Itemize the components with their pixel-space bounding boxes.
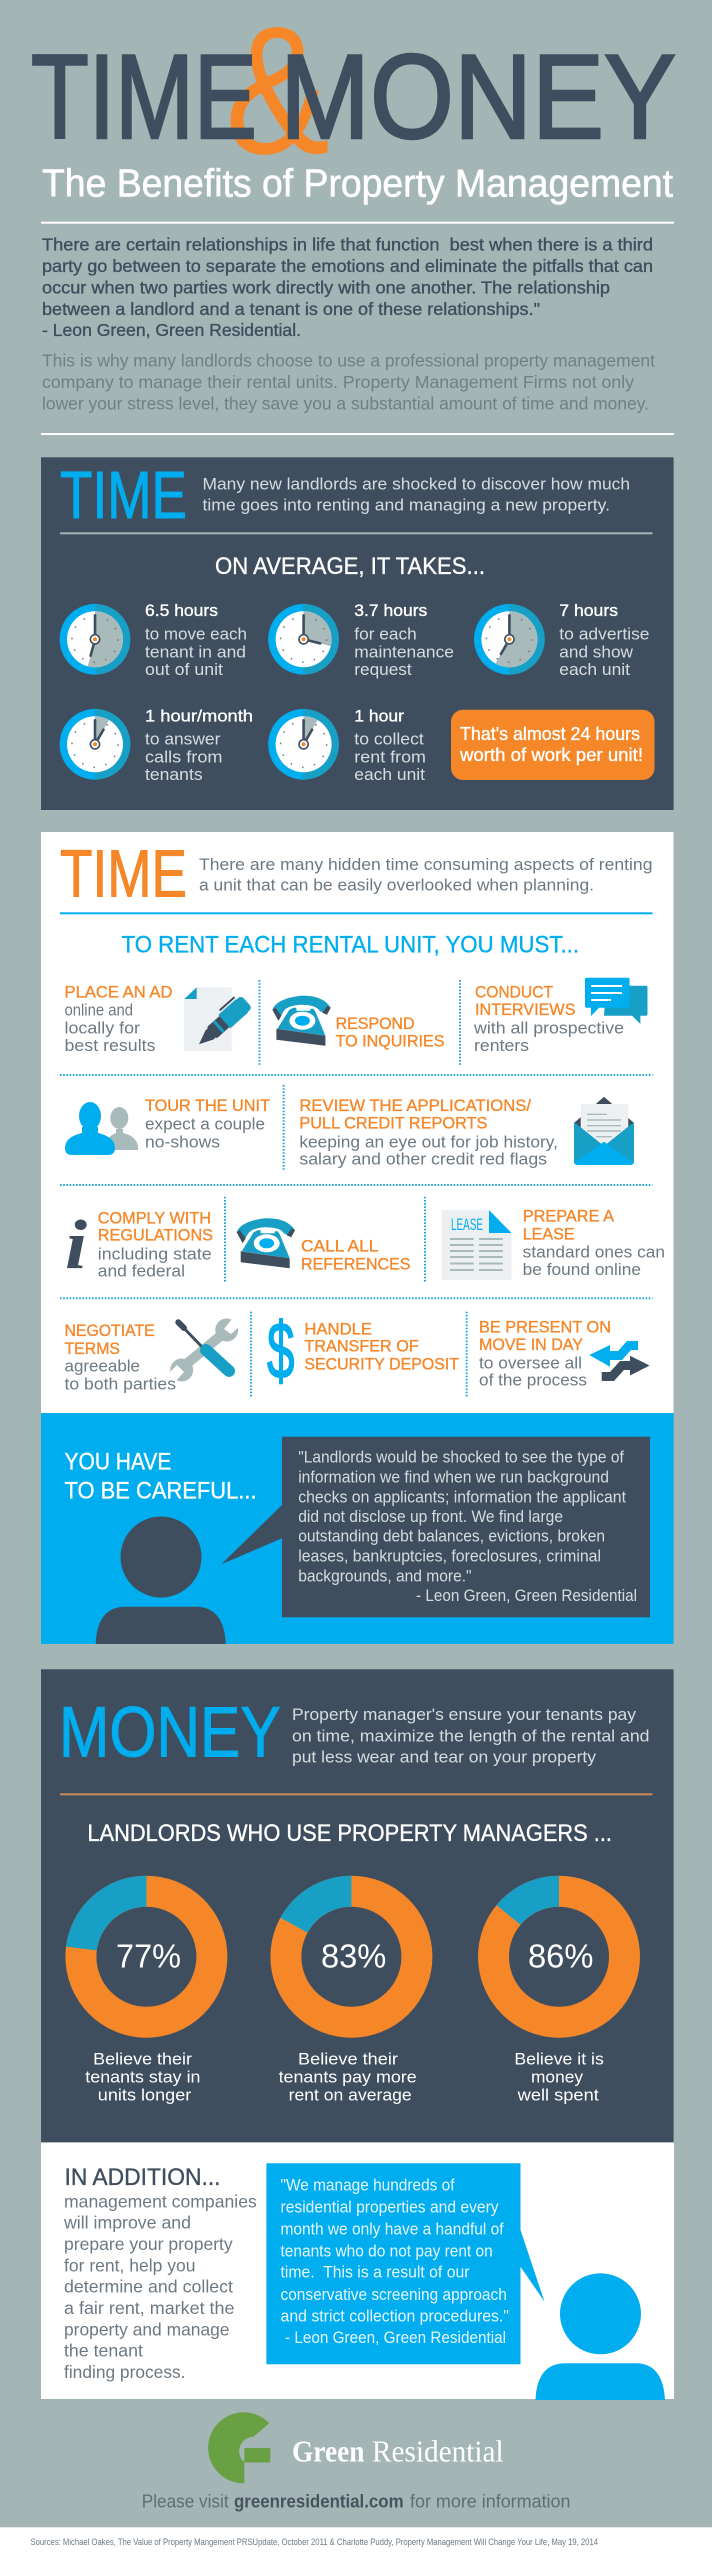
item: respond to inquiries: RESPOND [336, 1014, 415, 1033]
speech bubble quote: leases, bankruptcies, foreclosures, criminal [298, 1548, 601, 1566]
speech bubble quote: conservative screening approach [280, 2286, 507, 2304]
label: 86%: Believe it is [514, 2050, 604, 2068]
item: call all references: REFERENCES [301, 1254, 410, 1273]
footer: sources [0, 2527, 712, 2560]
intro text: a unit that can be easily overlooked when planning. [199, 876, 594, 895]
text: 3.7 hours: request [354, 661, 412, 679]
intro paragraph [42, 351, 655, 413]
subheading: LANDLORDS WHO USE PROPERTY MANAGERS ... [87, 1820, 612, 1847]
item: place an ad [64, 982, 172, 1055]
icon: clock 1 hour [268, 709, 339, 780]
intro quote [42, 235, 653, 340]
item: handle transfer: TRANSFER OF [304, 1337, 419, 1356]
text: 1 hour: 1 hour [354, 707, 404, 726]
item: tour the unit: TOUR THE UNIT [145, 1096, 270, 1115]
item: be present: MOVE IN DAY [479, 1335, 583, 1354]
icon: clock 6.5 hours [60, 604, 130, 675]
icon: chat bubbles [585, 978, 648, 1024]
item: review applications: PULL CREDIT REPORTS [299, 1113, 487, 1132]
logo: Green Residential: Residential [372, 2434, 504, 2469]
label: 86%: money [531, 2069, 584, 2087]
text block: finding process. [64, 2362, 186, 2382]
speech bubble quote: - Leon Green, Green Residential [416, 1587, 637, 1605]
heading: TO BE CAREFUL... [64, 1477, 257, 1504]
item: negotiate terms: NEGOTIATE [64, 1321, 155, 1340]
logo: Green Residential [208, 2412, 504, 2483]
item: place an ad: PLACE AN AD [64, 982, 172, 1001]
item: tour the unit [145, 1096, 270, 1151]
panel: hidden time tasks [41, 832, 674, 1413]
item: handle transfer [304, 1319, 459, 1373]
speech bubble quote: "Landlords would be shocked to see the type of [298, 1449, 624, 1467]
item: tour the unit: no-shows [145, 1132, 220, 1151]
visit line [142, 2492, 571, 2512]
label: 77%: units longer [98, 2087, 192, 2105]
text: 1 hour/month [145, 707, 253, 784]
icon: envelope [574, 1097, 634, 1165]
item: comply with regulations: COMPLY WITH [98, 1208, 211, 1227]
text: 1 hour: rent from [354, 748, 426, 766]
item: review applications: keeping an eye out for job history, [299, 1132, 558, 1151]
item: be present [479, 1318, 611, 1390]
donut chart: 86% [494, 1876, 624, 2022]
text: 6.5 hours [145, 601, 247, 679]
donut chart: 83% [280, 1876, 417, 2022]
text: 1 hour/month: tenants [145, 766, 203, 784]
panel: time on average [41, 457, 674, 810]
footer: sources: Sources: Michael Oakes, The Value of Property Mangement PRSUpdate, October 2011 & Charlotte Puddy, Property Management Will Change Your Life, May 19, 2014 [30, 2537, 598, 2548]
panel: you have to be careful [41, 1413, 674, 1644]
icon: telephone [272, 996, 331, 1046]
item: place an ad: locally for [64, 1018, 140, 1037]
text block: property and manage [64, 2319, 230, 2339]
icon: person speaking [536, 2273, 665, 2400]
text: 1 hour [354, 707, 426, 784]
text: 7 hours: each unit [559, 661, 630, 679]
intro quote: - Leon Green, Green Residential. [42, 320, 301, 340]
icon: info i: i [65, 1207, 88, 1284]
item: prepare a lease: LEASE [523, 1224, 575, 1243]
speech bubble quote: and strict collection procedures." [280, 2307, 509, 2325]
item: prepare a lease [523, 1207, 665, 1279]
item: be present: to oversee all [479, 1353, 582, 1372]
icon: pen and paper [184, 987, 253, 1051]
title: Time & Money [31, 0, 676, 192]
item: negotiate terms: TERMS [64, 1339, 120, 1358]
intro quote: There are certain relationships in life that function best when there is a third [42, 235, 653, 255]
item: handle transfer: HANDLE [304, 1319, 372, 1338]
label: 83% [279, 2050, 417, 2105]
icon: clock 1 hour/month [60, 709, 130, 780]
speech bubble quote [266, 2163, 544, 2364]
speech bubble quote: time. This is a result of our [280, 2264, 470, 2282]
text: 1 hour/month: calls from [145, 748, 222, 766]
item: conduct interviews: INTERVIEWS [475, 1000, 576, 1019]
label: 86%: well spent [517, 2087, 599, 2105]
visit line: for more information [410, 2492, 570, 2512]
subheading: ON AVERAGE, IT TAKES... [215, 553, 485, 580]
text: 7 hours: and show [559, 643, 633, 661]
text: 1 hour/month: 1 hour/month [145, 707, 253, 726]
subheading: TO RENT EACH RENTAL UNIT, YOU MUST... [122, 932, 579, 959]
text: 6.5 hours: tenant in and [145, 643, 246, 661]
panel: in addition [41, 2142, 674, 2400]
intro text [292, 1705, 650, 1767]
panel: money [41, 1669, 674, 2142]
item: respond to inquiries: TO INQUIRIES [336, 1032, 444, 1051]
callout: almost 24 hours [451, 710, 654, 780]
intro text: time goes into renting and managing a new property. [202, 496, 610, 515]
heading: MONEY: MONEY [59, 1694, 281, 1773]
text: 6.5 hours: to move each [145, 625, 247, 643]
item: negotiate terms [64, 1321, 176, 1393]
item: review applications: salary and other credit red flags [299, 1149, 547, 1168]
icon: swap arrows [589, 1345, 650, 1376]
intro text: There are many hidden time consuming aspects of renting [199, 855, 652, 874]
label: 86% [514, 2050, 604, 2105]
text: 1 hour: to collect [354, 730, 424, 748]
intro text: put less wear and tear on your property [292, 1748, 597, 1767]
text block: management companies [64, 2191, 257, 2211]
intro quote: occur when two parties work directly with one another. The relationship [42, 278, 610, 298]
intro paragraph: company to manage their rental units. Property Management Firms not only [42, 372, 634, 392]
text: 6.5 hours: 6.5 hours [145, 601, 218, 620]
text block: the tenant [64, 2341, 143, 2361]
item: be present: BE PRESENT ON [479, 1318, 611, 1337]
heading: TIME orange: TIME [60, 837, 187, 912]
speech bubble quote: month we only have a handful of [280, 2221, 504, 2239]
speech bubble quote [221, 1437, 650, 1617]
callout: almost 24 hours: worth of work per unit! [459, 745, 643, 765]
subtitle: The Benefits of Property Management [42, 163, 673, 206]
item: conduct interviews: with all prospective [473, 1018, 624, 1037]
item: conduct interviews [473, 982, 624, 1055]
text: 1 hour: each unit [354, 766, 425, 784]
item: review applications [299, 1096, 558, 1168]
label: 83%: Believe their [298, 2050, 399, 2068]
item: conduct interviews: CONDUCT [475, 982, 553, 1001]
intro text: Property manager's ensure your tenants pay [292, 1705, 637, 1724]
label: 77% [85, 2050, 200, 2105]
item: call all references: CALL ALL [301, 1237, 378, 1256]
speech bubble quote: checks on applicants; information the applicant [298, 1488, 626, 1506]
item: comply with regulations: REGULATIONS [98, 1226, 213, 1245]
item: comply with regulations [98, 1208, 213, 1281]
icon: wrench and screwdriver [167, 1318, 240, 1382]
icon: two people [65, 1102, 138, 1155]
title: Time & Money: TIME [31, 30, 257, 164]
label: 77%: Believe their [93, 2050, 193, 2068]
donut chart: 83%: 83% [321, 1937, 386, 1974]
item: review applications: REVIEW THE APPLICATIONS/ [299, 1096, 531, 1115]
donut chart: 86%: 86% [528, 1937, 593, 1974]
text: 7 hours: to advertise [559, 625, 650, 643]
text: 7 hours [559, 601, 650, 679]
item: place an ad: best results [64, 1036, 156, 1055]
donut chart: 77%: 77% [116, 1937, 181, 1974]
item: prepare a lease: be found online [523, 1260, 641, 1279]
text: 3.7 hours: for each [354, 625, 417, 643]
label: 83%: tenants pay more [279, 2069, 417, 2087]
intro text [202, 474, 630, 515]
heading [64, 1448, 257, 1504]
item: conduct interviews: renters [474, 1036, 529, 1055]
text block: determine and collect [64, 2277, 233, 2297]
logo: Green Residential: Green [292, 2434, 364, 2469]
icon: telephone 2 [237, 1218, 295, 1268]
heading: TIME: TIME [60, 458, 187, 533]
icon: clock 7 hours [474, 604, 545, 675]
text: 6.5 hours: out of unit [145, 661, 223, 679]
callout: almost 24 hours: That's almost 24 hours [460, 724, 640, 744]
speech bubble quote: backgrounds, and more." [298, 1568, 472, 1586]
item: negotiate terms: to both parties [64, 1374, 176, 1393]
item: be present: of the process [479, 1371, 587, 1390]
intro text: on time, maximize the length of the rental and [292, 1726, 650, 1745]
heading: YOU HAVE [64, 1448, 171, 1475]
item: call all references [301, 1237, 410, 1273]
item: tour the unit: expect a couple [145, 1114, 265, 1133]
speech bubble quote: residential properties and every [280, 2199, 499, 2217]
speech bubble quote: - Leon Green, Green Residential [285, 2329, 506, 2347]
intro text [199, 855, 652, 895]
text: 7 hours: 7 hours [559, 601, 618, 620]
heading: IN ADDITION... [64, 2164, 220, 2191]
text: 1 hour/month: to answer [145, 730, 221, 748]
speech bubble quote: "We manage hundreds of [280, 2177, 455, 2195]
visit line: greenresidential.com [234, 2492, 404, 2512]
text: 3.7 hours: maintenance [354, 643, 454, 661]
text block [63, 2191, 257, 2382]
text block: a fair rent, market the [64, 2298, 234, 2318]
icon: lease document: LEASE [451, 1215, 483, 1234]
label: 83%: rent on average [289, 2087, 412, 2105]
item: negotiate terms: agreeable [64, 1357, 140, 1376]
speech bubble quote: information we find when we run background [298, 1468, 609, 1486]
visit line: Please visit [142, 2492, 229, 2512]
text: 3.7 hours [354, 601, 454, 679]
intro quote: between a landlord and a tenant is one of these relationships." [42, 299, 540, 319]
item: place an ad: online and [64, 1001, 133, 1020]
text block: for rent, help you [64, 2255, 196, 2275]
text block: prepare your property [64, 2234, 233, 2254]
item: handle transfer: SECURITY DEPOSIT [304, 1354, 459, 1373]
speech bubble quote: outstanding debt balances, evictions, broken [298, 1528, 605, 1546]
title: Time & Money: MONEY [280, 30, 676, 164]
item: comply with regulations: including state [98, 1244, 212, 1263]
donut chart: 77% [66, 1876, 212, 2022]
speech bubble quote: did not disclose up front. We find large [298, 1508, 563, 1526]
intro text: Many new landlords are shocked to discover how much [202, 474, 630, 493]
intro quote: party go between to separate the emotions and eliminate the pitfalls that can [42, 256, 653, 276]
item: respond to inquiries [336, 1014, 444, 1051]
speech bubble quote: tenants who do not pay rent on [280, 2243, 493, 2261]
intro paragraph: This is why many landlords choose to use a professional property management [42, 351, 655, 371]
item: prepare a lease: PREPARE A [523, 1207, 615, 1226]
label: 77%: tenants stay in [85, 2069, 200, 2087]
icon: lease document [442, 1210, 512, 1280]
icon: dollar sign: $ [267, 1306, 294, 1395]
intro paragraph: lower your stress level, they save you a substantial amount of time and money. [42, 393, 649, 413]
icon: clock 3.7 hours [268, 604, 339, 675]
text: 3.7 hours: 3.7 hours [354, 601, 427, 620]
text block: will improve and [63, 2213, 191, 2233]
icon: person speaking [96, 1516, 226, 1644]
item: prepare a lease: standard ones can [523, 1243, 665, 1262]
item: comply with regulations: and federal [98, 1262, 185, 1281]
